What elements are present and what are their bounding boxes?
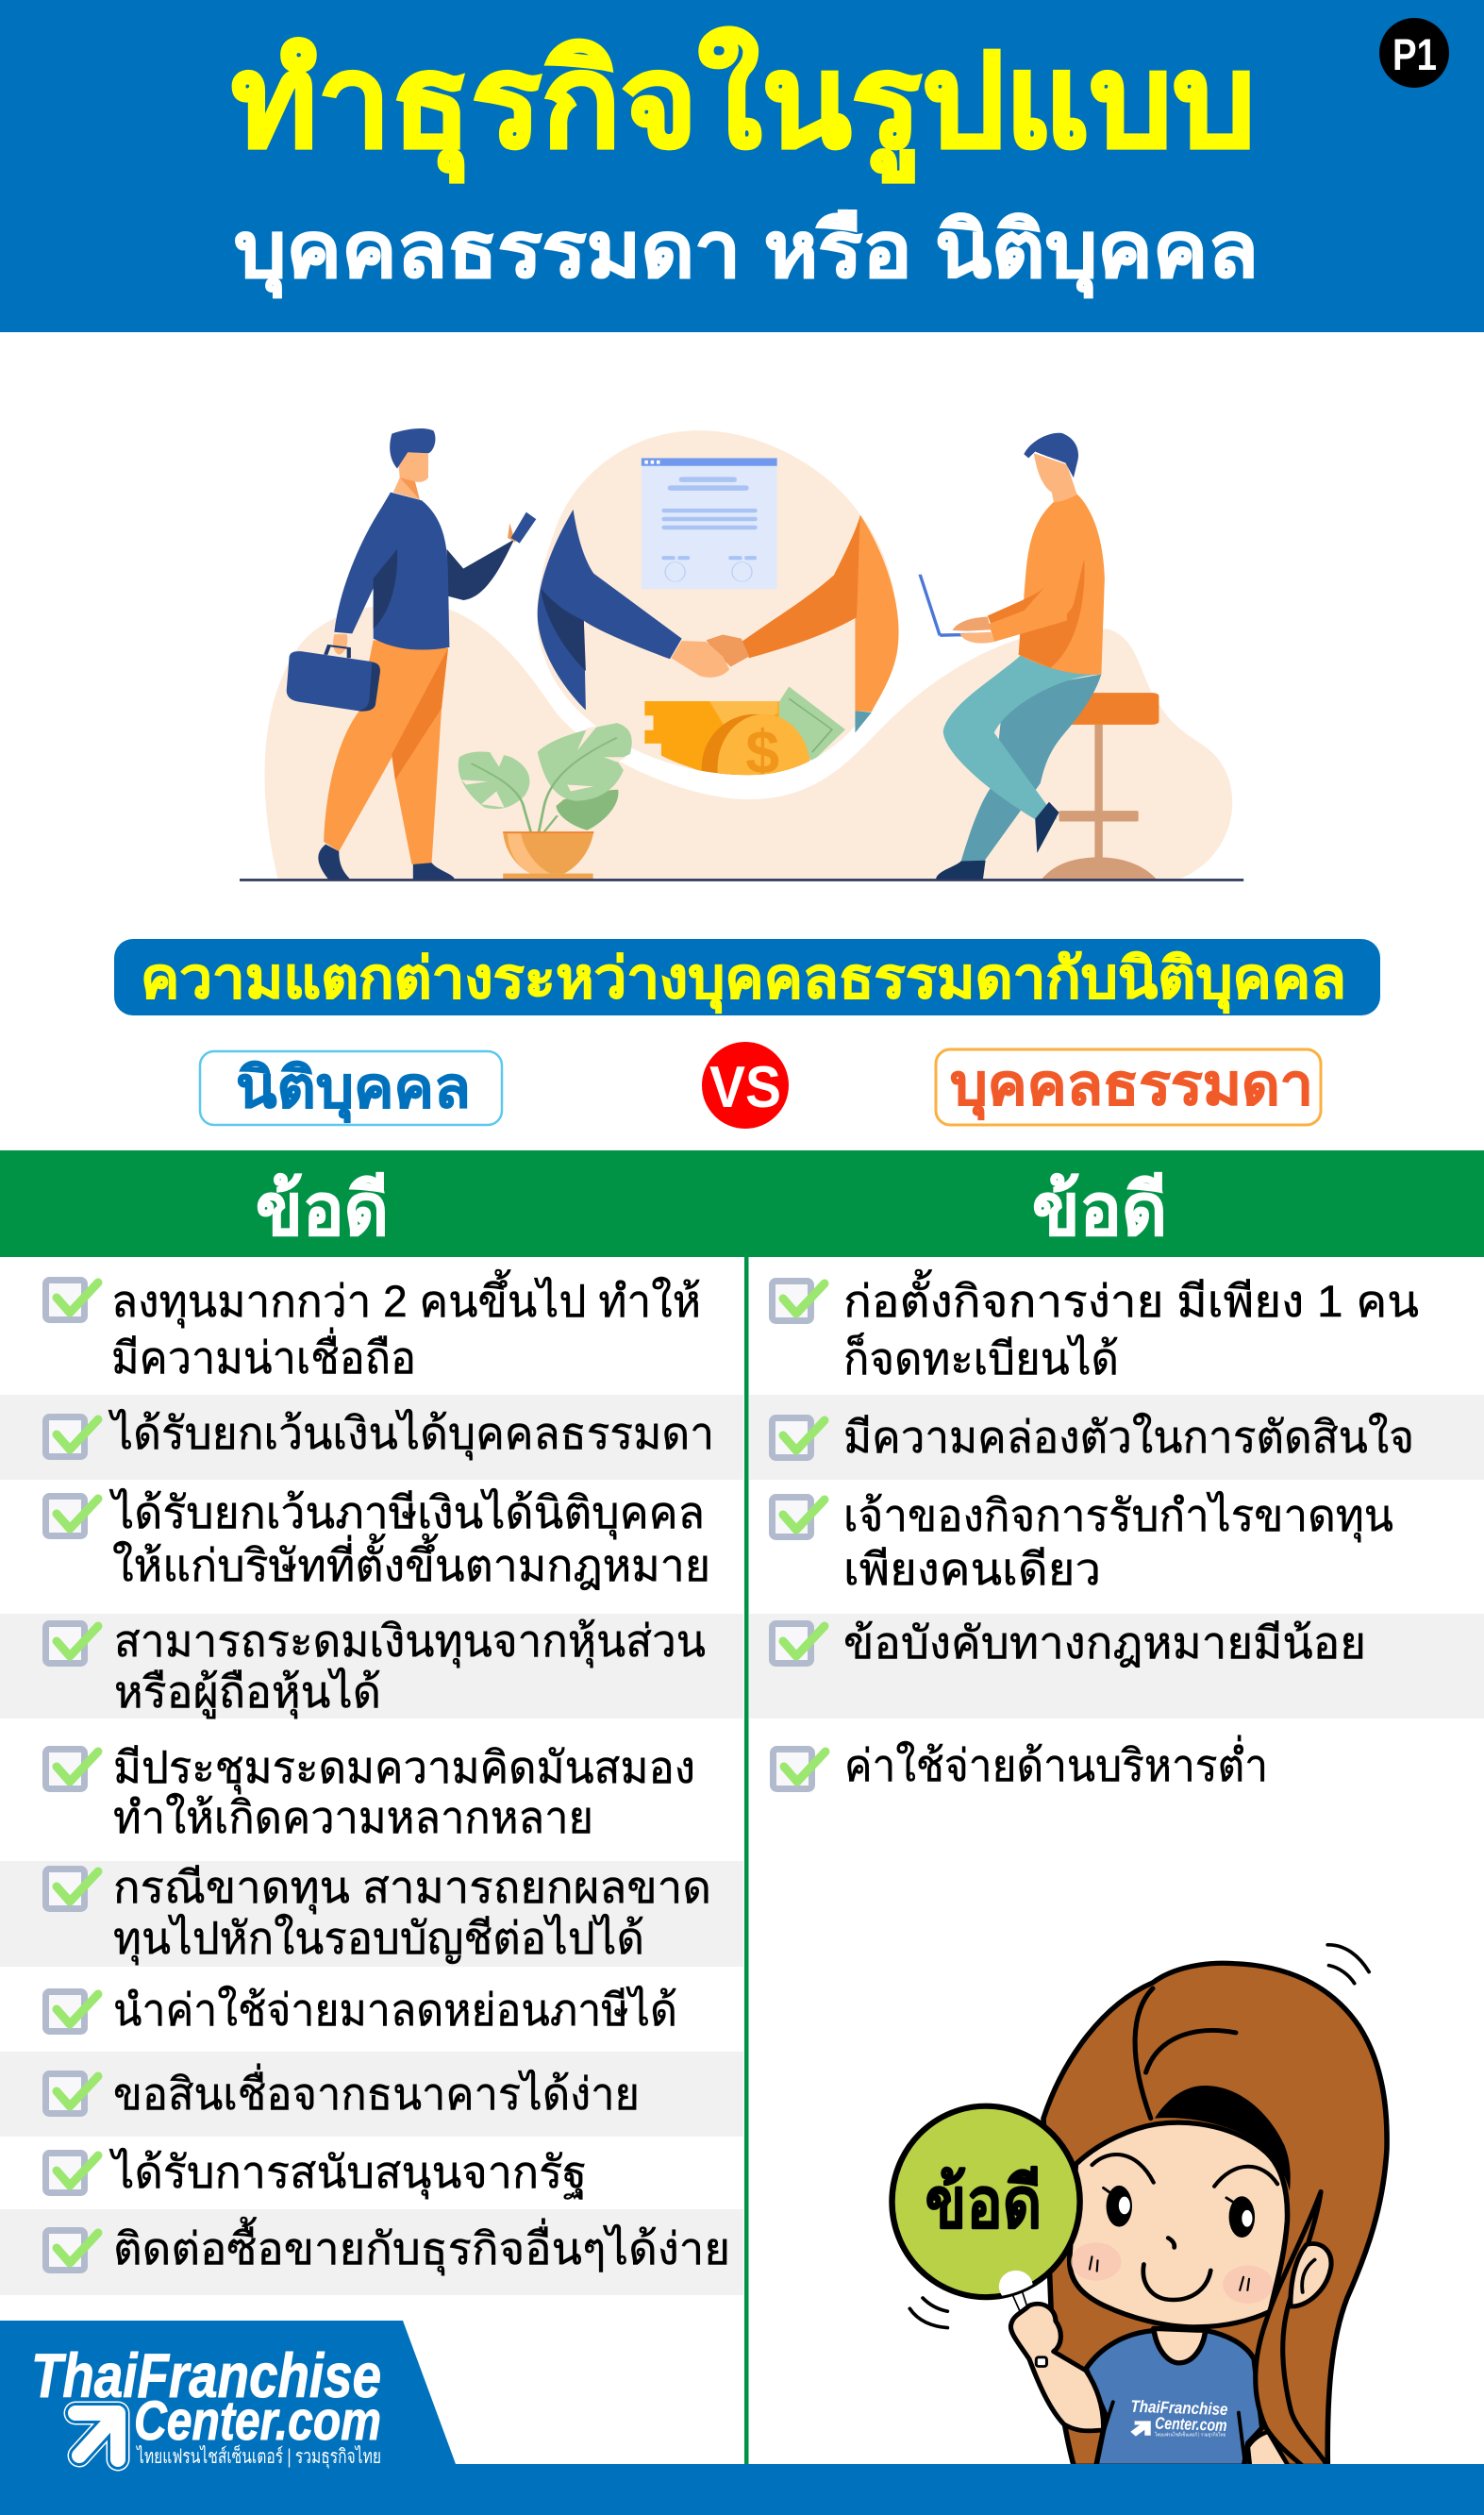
central egg shape — [537, 430, 897, 775]
item 1: มีความน่าเชื่อถือ — [111, 1327, 416, 1383]
shirt logo: ไทยแฟรนไชส์เซ็นเตอร์ | รวมธุรกิจไทย — [1154, 2431, 1226, 2439]
header banner — [0, 0, 1484, 332]
item 3: เจ้าของกิจการรับกำไรขาดทุน — [843, 1490, 1393, 1543]
subtitle: บุคคลธรรมดา หรือ นิติบุคคล — [234, 208, 1259, 298]
advantages header band: ข้อดี — [256, 1170, 389, 1250]
item 8: ขอสินเชื่อจากธนาคารได้ง่าย — [113, 2063, 640, 2119]
item 6: ทุนไปหักในรอบบัญชีต่อไปได้ — [113, 1913, 644, 1966]
item 3: เพียงคนเดียว — [843, 1544, 1101, 1594]
illustration: business handshake — [240, 428, 1243, 881]
title: ทำธุรกิจในรูปแบบ — [231, 27, 1256, 183]
face — [1070, 2122, 1288, 2327]
logo wordmark: ThaiFranchise — [31, 2340, 381, 2410]
stool — [1035, 693, 1159, 879]
grey row bands, left column — [0, 1395, 743, 2295]
background blob — [265, 604, 1232, 879]
logo panel: Center.com — [134, 2390, 381, 2452]
item 9: ได้รับการสนับสนุนจากรัฐ — [108, 2147, 587, 2200]
page badge P1 — [1379, 18, 1449, 88]
right column: advantages of natural person — [772, 1269, 1419, 1790]
item 3 — [45, 1487, 710, 1590]
logo Thai tagline: ไทยแฟรนไชส์เซ็นเตอร์ | รวมธุรกิจไทย — [136, 2443, 381, 2469]
item 5 — [45, 1742, 695, 1842]
section banner: ความแตกต่างระหว่างบุคคลธรรมดากับนิติบุคคล — [141, 947, 1346, 1014]
hair strands — [1135, 1988, 1153, 2119]
advantages header band — [0, 1150, 1484, 1257]
item 2: มีความคล่องตัวในการตัดสินใจ — [843, 1412, 1414, 1462]
blue arm — [538, 510, 682, 710]
item 1 — [45, 1269, 701, 1383]
item 1: ลงทุนมากกว่า 2 คนขึ้นไป ทำให้ — [111, 1269, 701, 1329]
item 1: ก็จดทะเบียนได้ — [843, 1332, 1119, 1383]
grey row bands, right column — [749, 1395, 1484, 1719]
contract document — [642, 458, 777, 589]
item 6: กรณีขาดทุน สามารถยกผลขาด — [113, 1862, 711, 1915]
item 5: ค่าใช้จ่ายด้านบริหารต่ำ — [844, 1735, 1268, 1790]
ear — [1291, 2244, 1331, 2306]
label: juristic person: นิติบุคคล — [236, 1056, 471, 1123]
item 10: ติดต่อซื้อขายกับธุรกิจอื่นๆได้ง่าย — [113, 2217, 730, 2276]
left column: advantages of juristic person — [45, 1269, 730, 2276]
VS badge: VS — [709, 1055, 781, 1120]
nose and smile — [1168, 2238, 1175, 2248]
coins and banknote — [644, 687, 845, 776]
motion marks — [909, 1945, 1369, 2328]
footer bar — [0, 2464, 1484, 2515]
blush — [1071, 2242, 1121, 2281]
item 5: มีประชุมระดมความคิดมันสมอง — [113, 1742, 695, 1795]
coins and banknote: $ — [745, 718, 779, 786]
shirt logo: Center.com — [1155, 2413, 1227, 2435]
item 1: ก่อตั้งกิจการง่าย มีเพียง 1 คน — [843, 1269, 1419, 1326]
logo arrow — [75, 2413, 118, 2459]
VS badge — [702, 1042, 789, 1129]
item 6 — [45, 1862, 711, 1966]
advantages header band: ข้อดี — [1032, 1170, 1167, 1250]
left businessman — [287, 428, 536, 880]
ground line — [240, 879, 1243, 881]
plant — [459, 723, 632, 880]
orange arm — [740, 515, 899, 732]
eyes and brows — [1092, 2155, 1277, 2238]
column divider — [744, 1257, 749, 2464]
black hair band — [1155, 2086, 1291, 2191]
hand and arm — [1010, 2304, 1104, 2431]
label: juristic person — [200, 1051, 502, 1125]
sign paddle — [892, 2106, 1080, 2313]
shirt — [1086, 2330, 1262, 2466]
right man with laptop — [920, 433, 1105, 880]
item 3: ให้แก่บริษัทที่ตั้งขึ้นตามกฎหมาย — [112, 1534, 710, 1590]
shirt logo — [1130, 2396, 1228, 2439]
page badge P1: P1 — [1392, 29, 1437, 79]
item 4: สามารถระดมเงินทุนจากหุ้นส่วน — [114, 1616, 706, 1668]
item 4: หรือผู้ถือหุ้นได้ — [114, 1667, 381, 1719]
handshake — [671, 634, 749, 678]
shirt logo: ThaiFranchise — [1130, 2396, 1228, 2419]
item 4: ข้อบังคับทางกฎหมายมีน้อย — [843, 1618, 1366, 1668]
logo panel — [0, 2321, 456, 2469]
label: natural person: บุคคลธรรมดา — [950, 1053, 1313, 1120]
item 2: ได้รับยกเว้นเงินได้บุคคลธรรมดา — [108, 1408, 714, 1461]
sign paddle: ข้อดี — [925, 2164, 1042, 2243]
item 4 — [45, 1616, 706, 1719]
item 7: นำค่าใช้จ่ายมาลดหย่อนภาษีได้ — [113, 1985, 677, 2035]
item 3: ได้รับยกเว้นภาษีเงินได้นิติบุคคล — [108, 1487, 705, 1540]
item 5: ทำให้เกิดความหลากหลาย — [113, 1792, 593, 1842]
hair back — [1043, 1963, 1387, 2466]
mascot girl holding sign — [892, 1945, 1387, 2466]
item 3 — [772, 1490, 1393, 1594]
sleeve skin — [1248, 2432, 1289, 2466]
item 1 — [772, 1269, 1419, 1383]
